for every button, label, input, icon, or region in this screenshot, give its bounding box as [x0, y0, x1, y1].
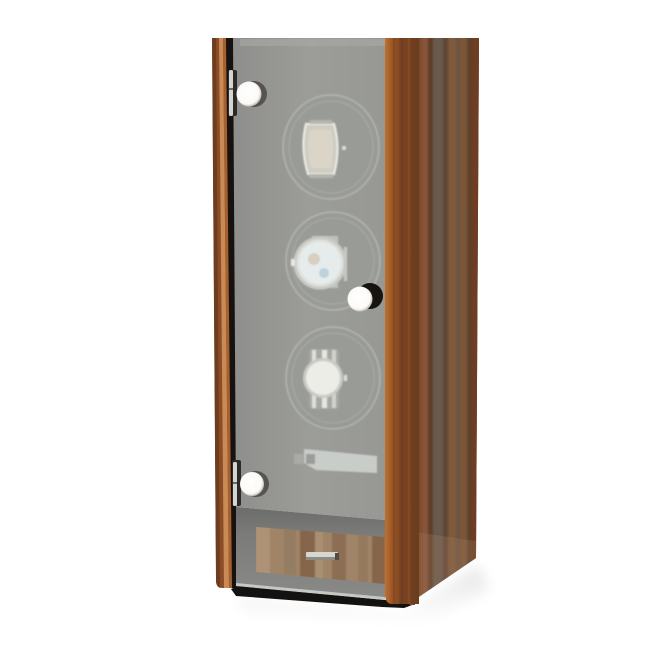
glass door [233, 38, 385, 600]
cabinet base [231, 586, 415, 608]
upper glass panel [233, 38, 385, 520]
left wood post [212, 38, 237, 588]
watch winder cabinet illustration [212, 38, 486, 608]
bottom hinge knob [240, 471, 269, 497]
drawer handle [306, 552, 339, 560]
lower dark glass band [236, 507, 385, 600]
lower glass edge [236, 583, 385, 600]
bottom hinge [232, 460, 241, 506]
side wood panel [410, 30, 482, 620]
top glass reflection [240, 39, 385, 46]
display panel [294, 449, 377, 473]
top hinge [228, 70, 237, 116]
door handle knob [348, 283, 383, 312]
front right wood post [385, 30, 420, 620]
winder 1 with watch [283, 95, 379, 199]
dark door gap [226, 38, 237, 588]
floor shadow [235, 565, 490, 625]
winder 2 with watch [286, 212, 380, 310]
winder 3 with watch [286, 327, 380, 429]
drawer front [256, 527, 385, 584]
top hinge knob [236, 81, 267, 107]
